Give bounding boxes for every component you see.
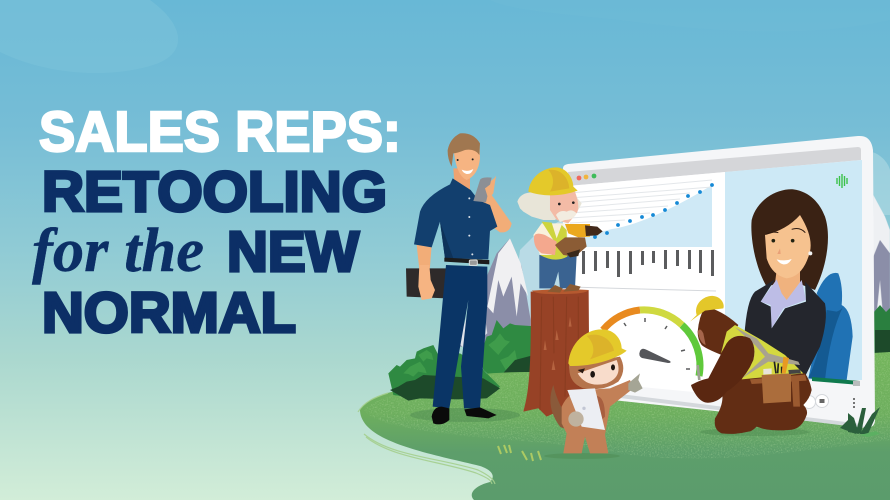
gauge ticks [624, 318, 690, 369]
gauge needle [639, 349, 671, 363]
phone hand [485, 176, 496, 199]
bush: right edge [874, 305, 890, 354]
tools [774, 362, 782, 373]
helmet [568, 329, 627, 366]
tool pouch [762, 373, 791, 403]
phone [473, 177, 492, 202]
tree stump [523, 289, 589, 417]
title script: for the: for the [32, 217, 204, 285]
left shoe [432, 407, 449, 424]
smile [462, 169, 473, 174]
safety vest [540, 222, 567, 260]
upper body [414, 133, 512, 275]
face [765, 215, 811, 278]
helmet shade [548, 170, 569, 192]
title line: NORMAL: NORMAL [42, 281, 296, 345]
gloves [555, 237, 587, 257]
hand on tablet [418, 265, 435, 300]
presenter in video [744, 189, 853, 380]
bush: front left [388, 345, 500, 401]
right forearm [475, 177, 512, 232]
hair strands [578, 368, 585, 373]
screen shadow edge [620, 394, 864, 428]
office chair [808, 273, 853, 380]
lower body [406, 265, 497, 424]
title [32, 100, 401, 345]
grass plant [840, 407, 880, 437]
grass swoosh lines [358, 393, 495, 484]
nose [777, 248, 781, 254]
gauge [603, 310, 700, 376]
eyes [558, 203, 561, 205]
vest straps [735, 327, 800, 378]
arm [691, 336, 754, 403]
pointing glove [628, 373, 643, 393]
bear with tool belt [690, 296, 812, 434]
face [453, 142, 480, 180]
blouse [761, 279, 806, 328]
tail [550, 385, 572, 429]
shirt buttons [468, 197, 473, 255]
boots [547, 285, 563, 293]
drill [565, 224, 590, 237]
helmet [528, 167, 578, 195]
title bar [568, 147, 861, 186]
tablet [567, 388, 605, 430]
hair [751, 189, 828, 290]
pale far mountain [510, 215, 570, 340]
moustache [556, 210, 577, 222]
right snowy mountain [873, 195, 890, 320]
bar chart [582, 250, 714, 277]
belt [444, 258, 489, 264]
shirt [414, 178, 497, 259]
chart grid lines [570, 180, 712, 223]
plant base tuft [860, 431, 880, 437]
face [578, 360, 619, 385]
chest patch [597, 396, 605, 420]
background cloud shapes [0, 0, 890, 215]
grass speckle [364, 352, 890, 459]
bear head [698, 307, 738, 355]
snout [698, 330, 706, 345]
bush: back centre [480, 320, 540, 385]
face [550, 192, 578, 223]
smile [777, 259, 792, 264]
shirt [533, 223, 567, 255]
hard hat [690, 296, 724, 322]
video call screen [563, 136, 875, 428]
gauge arc [603, 310, 640, 330]
grass tufts [498, 445, 541, 461]
tool belt [750, 375, 807, 384]
sound level icon [837, 174, 847, 188]
mascot with tablet [550, 329, 643, 453]
lawn [358, 352, 890, 500]
line chart [570, 180, 714, 247]
title line: SALES REPS: SALES REPS: [39, 100, 401, 164]
man on phone [406, 133, 512, 424]
inventor character with drill [517, 167, 603, 293]
shadows on grass [410, 408, 810, 459]
wrench [698, 365, 699, 380]
left forearm [417, 245, 432, 275]
neck [775, 270, 800, 305]
hammer handle [792, 379, 800, 407]
pants [433, 265, 487, 408]
screen frame [563, 136, 875, 427]
eyes [771, 239, 775, 242]
title line: RETOOLING: RETOOLING [42, 160, 387, 224]
neck [453, 168, 470, 192]
jacket [744, 279, 826, 377]
brows [766, 229, 805, 234]
body [562, 380, 633, 453]
trousers [539, 255, 577, 288]
right video panel [725, 160, 862, 380]
hair [517, 192, 582, 220]
chart data dots [593, 183, 714, 239]
tablet hand [568, 411, 584, 427]
eyes [457, 159, 459, 161]
chart area [585, 185, 712, 247]
mountains [457, 195, 890, 350]
helmet shade [587, 335, 614, 359]
title word: NEW: NEW [227, 220, 359, 284]
hood [569, 357, 623, 389]
eyes [590, 371, 595, 378]
panel divider [570, 287, 716, 291]
arm [534, 234, 557, 255]
hair [448, 133, 480, 167]
left snowy mountain [457, 238, 531, 350]
window dots [577, 174, 596, 180]
tablet held [406, 268, 446, 298]
safety vest [721, 325, 803, 379]
right shoe [464, 407, 497, 418]
bottom controls bar [802, 377, 860, 408]
left white panel [568, 172, 725, 395]
earring [808, 251, 812, 255]
bear back and legs [715, 353, 812, 434]
grass hill [360, 352, 890, 500]
